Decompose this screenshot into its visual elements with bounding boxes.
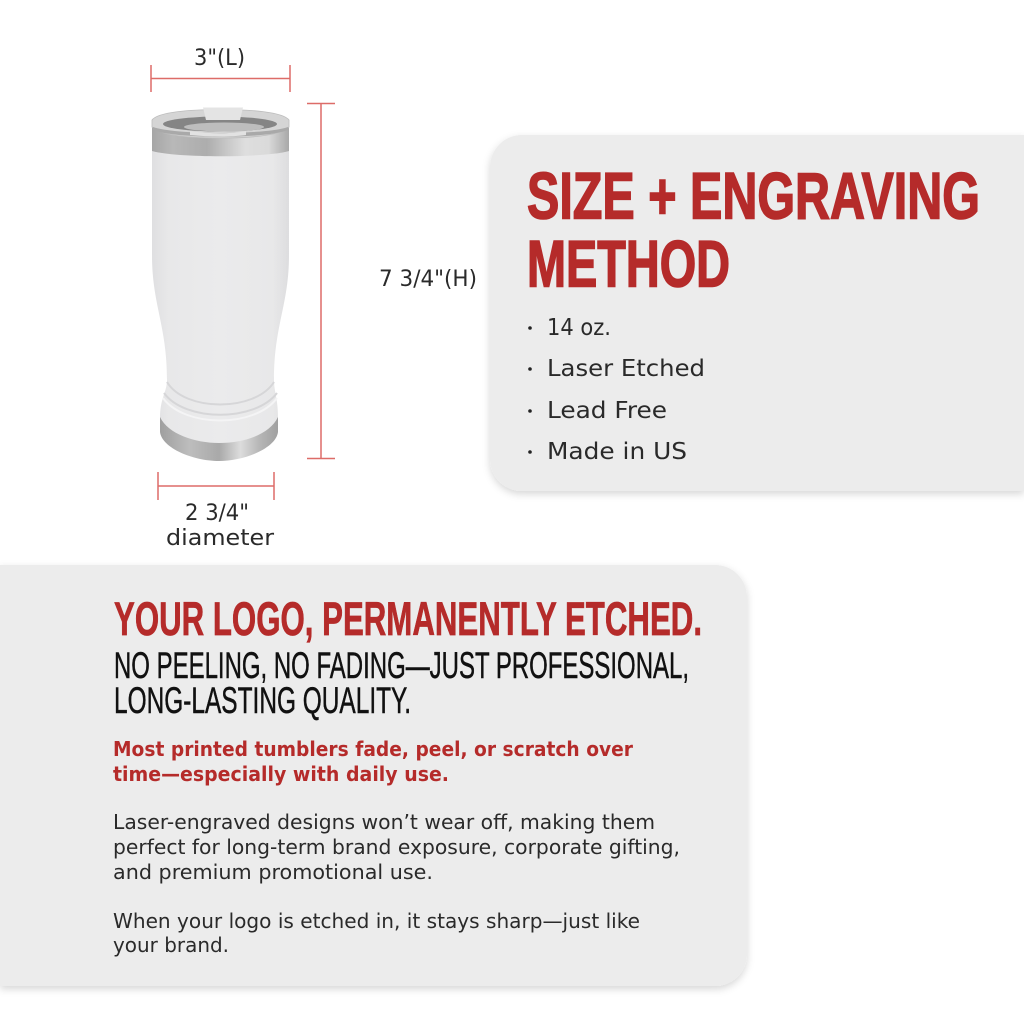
body paragraph two: When your logo is etched in, it stays sharp—just like [113,909,640,933]
spec list: Laser Etched [547,356,705,382]
spec list: 14 oz. [547,315,611,341]
tumbler illustration [152,108,289,461]
lid inner surface [184,122,264,132]
dimension: diameter 2 3/4 in: 2 3/4" [185,501,249,526]
body paragraph one: Laser-engraved designs won’t wear off, making them [113,810,655,834]
lid rim [152,110,289,138]
base ridges [164,382,277,415]
spec list [528,315,705,465]
lid tab [203,108,243,120]
lid front lip [153,127,288,137]
subheadline: NO PEELING, NO FADING—JUST PROFESSIONAL, [114,645,689,686]
heading: METHOD [527,226,730,300]
panel: permanently etched logo [0,565,747,986]
spec list: Made in US [547,439,687,465]
red emphasis text: Most printed tumblers fade, peel, or scratch over [113,737,634,761]
subheadline: LONG-LASTING QUALITY. [114,680,411,721]
dimension: width 3 in: 3"(L) [194,46,245,71]
body paragraph one: and premium promotional use. [113,860,433,884]
lid front highlight [190,131,246,136]
steel base ring [160,417,278,461]
panel background [0,565,747,986]
body paragraph one: perfect for long-term brand exposure, corporate gifting, [113,835,680,859]
spec list: Lead Free [547,398,667,424]
panel: size and engraving method [490,135,1024,491]
lid opening [163,116,277,132]
body paragraph two: your brand. [113,933,229,957]
headline: YOUR LOGO, PERMANENTLY ETCHED. [114,592,702,645]
dimension: height 7 3/4 in: 7 3/4"(H) [379,267,477,292]
dimension: width 3 in [151,46,290,92]
red emphasis text: time—especially with daily use. [113,762,449,786]
dimension: height 7 3/4 in [307,103,477,459]
dimension: diameter 2 3/4 in: diameter [166,526,275,551]
steel top band [152,122,289,156]
panel background [490,135,1024,491]
dimension: diameter 2 3/4 in [158,472,275,551]
tumbler body [152,148,289,446]
